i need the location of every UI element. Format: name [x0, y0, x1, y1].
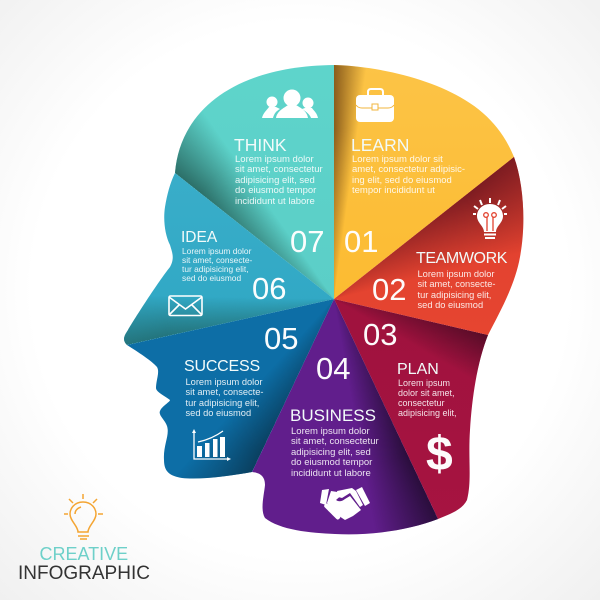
number 02: 02: [372, 272, 406, 307]
text: teamwork body: Lorem ipsum dolor: [418, 269, 494, 279]
text: infographic: INFOGRAPHIC: [18, 563, 150, 584]
text: business body: do eiusmod tempor: [291, 457, 372, 468]
text: learn body: ing elit, sed do eiusmod: [352, 175, 452, 186]
heading: think: THINK: [234, 135, 286, 155]
text: business body: sit amet, consectetur: [291, 436, 379, 447]
text: think body: sit amet, consectetur: [235, 164, 323, 175]
text: idea body: tur adipisicing elit,: [182, 264, 249, 274]
text: think body: Lorem ipsum dolor: [235, 154, 314, 165]
text: success body: [186, 377, 264, 418]
text: teamwork body: tur adipisicing elit,: [418, 290, 491, 300]
text: think body: adipisicing elit, sed: [235, 175, 315, 186]
text: creative: CREATIVE: [40, 544, 128, 564]
text: plan body: adipisicing elit,: [398, 408, 457, 418]
heading: idea: IDEA: [181, 229, 217, 246]
text: teamwork body: [418, 269, 496, 310]
panel: 03 plan: [334, 299, 488, 519]
text: learn body: amet, consectetur adipisic-: [352, 164, 465, 175]
panel: 04 business: [252, 299, 438, 534]
heading: learn: LEARN: [351, 135, 409, 155]
text: learn body: Lorem ipsum dolor sit: [352, 154, 443, 165]
text: think body: do eiusmod tempor: [235, 185, 316, 196]
text: plan body: consectetur: [398, 398, 445, 408]
number 03: 03: [363, 317, 397, 352]
panel: 01 learn: [334, 65, 514, 299]
panel: 06 idea: [124, 173, 334, 345]
text: learn body: [352, 154, 465, 196]
text: teamwork body: sit amet, consecte-: [418, 279, 496, 289]
number 06: 06: [252, 271, 286, 306]
heading: teamwork: TEAMWORK: [416, 250, 507, 267]
text: business body: adipisicing elit, sed: [291, 447, 371, 458]
text: business body: [291, 426, 379, 479]
text: idea body: Lorem ipsum dolor: [182, 246, 251, 256]
number 07: 07: [290, 224, 324, 259]
text: business body: Lorem ipsum dolor: [291, 426, 370, 437]
text: success body: sit amet, consecte-: [186, 387, 264, 397]
panel: 02 teamwork: [334, 157, 524, 335]
text: think body: [235, 154, 323, 207]
text: success body: Lorem ipsum dolor: [186, 377, 262, 387]
text: idea body: sed do eiusmod: [182, 273, 241, 283]
heading: business: BUSINESS: [290, 406, 376, 425]
text: plan body: dolor sit amet,: [398, 388, 455, 398]
text: learn body: tempor incididunt ut: [352, 185, 435, 196]
text: plan body: Lorem ipsum: [398, 378, 450, 388]
panel: 07 think: [175, 65, 334, 299]
text: business body: incididunt ut labore: [291, 468, 371, 479]
text: plan body: [398, 378, 457, 418]
text: teamwork body: sed do eiusmod: [418, 300, 483, 310]
text: idea body: sit amet, consecte-: [182, 255, 252, 265]
number 05: 05: [264, 321, 298, 356]
number 01: 01: [344, 224, 378, 259]
logo: creative infographic: [18, 494, 150, 584]
text: idea body: [182, 246, 252, 283]
heading: plan: PLAN: [397, 361, 439, 378]
heading: success: SUCCESS: [184, 358, 260, 375]
panel: 05 success: [127, 299, 334, 478]
text: think body: incididunt ut labore: [235, 196, 315, 207]
text: success body: sed do eiusmod: [186, 408, 251, 418]
text: success body: tur adipisicing elit,: [186, 398, 259, 408]
icon: dollar: $: [426, 428, 453, 481]
number 04: 04: [316, 351, 350, 386]
